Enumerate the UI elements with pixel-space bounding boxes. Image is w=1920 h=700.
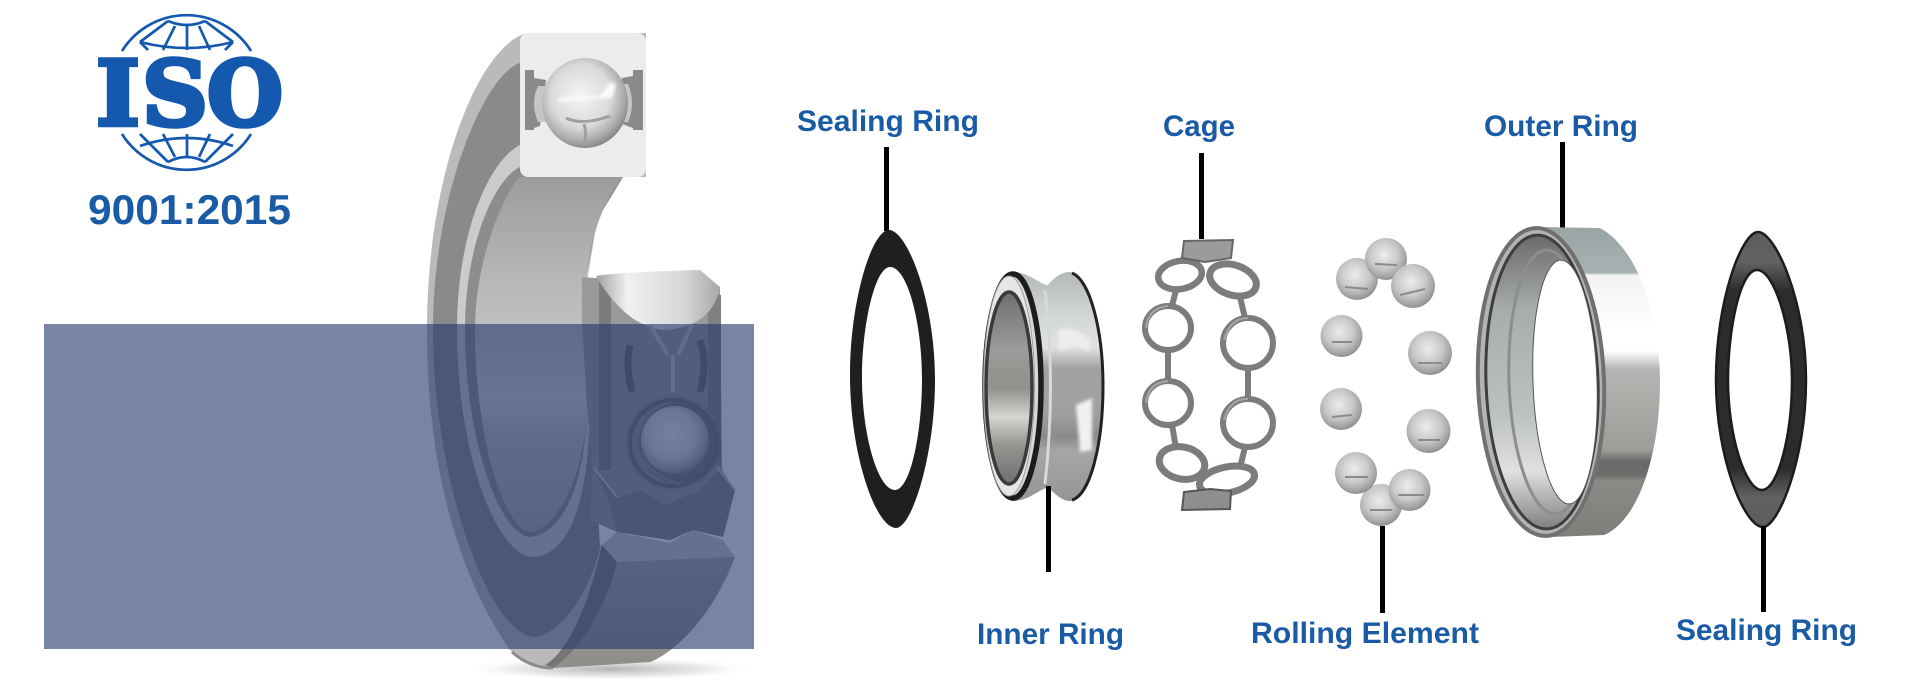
ball bbox=[1320, 388, 1362, 430]
cage highlights bbox=[1146, 306, 1248, 420]
ball bbox=[1388, 469, 1430, 511]
lower inner ring bbox=[582, 277, 735, 540]
cage top clip bbox=[1182, 240, 1233, 262]
front face bbox=[984, 276, 1034, 496]
inner ring body bbox=[1012, 272, 1103, 501]
ball bbox=[1408, 331, 1452, 375]
body highlight bbox=[1076, 398, 1092, 452]
leader line: inner ring bbox=[1046, 486, 1051, 572]
lower ball bbox=[625, 395, 721, 491]
outer surface bbox=[1540, 227, 1660, 537]
o-ring bbox=[985, 274, 1041, 498]
leader line: sealing ring right bbox=[1761, 526, 1766, 612]
cage bottom clip bbox=[1182, 489, 1231, 510]
upper cage inner lights bbox=[534, 84, 632, 122]
right flange edge bbox=[1072, 273, 1103, 500]
sealing ring left bbox=[850, 230, 935, 528]
label: outer ring: Outer Ring bbox=[1484, 110, 1638, 143]
bore groove bbox=[465, 167, 623, 537]
leader line: sealing ring left bbox=[884, 147, 889, 231]
sealing ring right bbox=[1716, 232, 1806, 527]
dark seal bbox=[433, 63, 620, 637]
upper body highlight bbox=[1058, 329, 1090, 352]
ISO letters bbox=[96, 41, 283, 147]
light race face bbox=[602, 530, 735, 562]
upper ball bbox=[542, 58, 628, 148]
upper cage left bbox=[525, 70, 546, 130]
label: sealing ring right: Sealing Ring bbox=[1676, 614, 1857, 647]
chrome raceway bbox=[596, 270, 720, 330]
light inner ring face bbox=[457, 145, 620, 557]
icon: globe bottom half bbox=[122, 134, 251, 170]
label: cage: Cage bbox=[1163, 110, 1235, 143]
cage bbox=[1145, 240, 1273, 510]
outer silhouette bbox=[427, 33, 735, 668]
icon: globe top half bbox=[122, 15, 251, 51]
blue overlay panel bbox=[44, 324, 754, 649]
label: sealing ring left: Sealing Ring bbox=[797, 105, 979, 138]
dark lower seat bbox=[594, 468, 735, 540]
ball bbox=[1391, 264, 1435, 308]
certification number: 9001:2015 bbox=[88, 186, 291, 233]
label: rolling element: Rolling Element bbox=[1251, 617, 1479, 650]
leader line: outer ring bbox=[1560, 142, 1565, 228]
ISO letters: I bbox=[96, 41, 140, 147]
dark strip bbox=[545, 545, 617, 668]
right side dark column bbox=[708, 295, 721, 465]
ground shadow bbox=[460, 657, 760, 681]
cage pockets bbox=[1145, 257, 1273, 499]
hole bbox=[1529, 259, 1601, 505]
bearing cutaway bbox=[44, 33, 760, 681]
ball bbox=[1320, 315, 1362, 357]
ball bbox=[1365, 238, 1407, 280]
upper cage right bbox=[622, 70, 643, 130]
outer ring section bbox=[553, 557, 735, 668]
inner ring bbox=[984, 272, 1103, 501]
bottom rim bbox=[512, 652, 553, 668]
bore bbox=[475, 177, 623, 532]
lower cage bbox=[628, 325, 704, 392]
ball bbox=[1406, 409, 1450, 453]
front face bbox=[1473, 226, 1609, 538]
ISO logo bbox=[96, 15, 283, 170]
lower dark column bbox=[599, 280, 611, 470]
leader line: cage bbox=[1199, 153, 1204, 239]
cage lips bbox=[593, 467, 735, 497]
bore bbox=[986, 292, 1032, 484]
ball bbox=[1335, 452, 1377, 494]
inner raceway bbox=[1481, 233, 1603, 531]
white cut face bbox=[520, 33, 646, 177]
label: inner ring: Inner Ring bbox=[977, 618, 1124, 651]
leader line: rolling element bbox=[1380, 526, 1385, 613]
groove highlight bbox=[1045, 290, 1050, 484]
ball bbox=[1336, 258, 1378, 300]
ISO letters: O bbox=[207, 41, 283, 147]
outer ring bbox=[1473, 226, 1660, 538]
ball bbox=[1360, 484, 1402, 526]
ball reflections bbox=[1332, 264, 1442, 510]
ISO letters: S bbox=[142, 41, 208, 147]
rolling elements bbox=[1320, 238, 1452, 526]
